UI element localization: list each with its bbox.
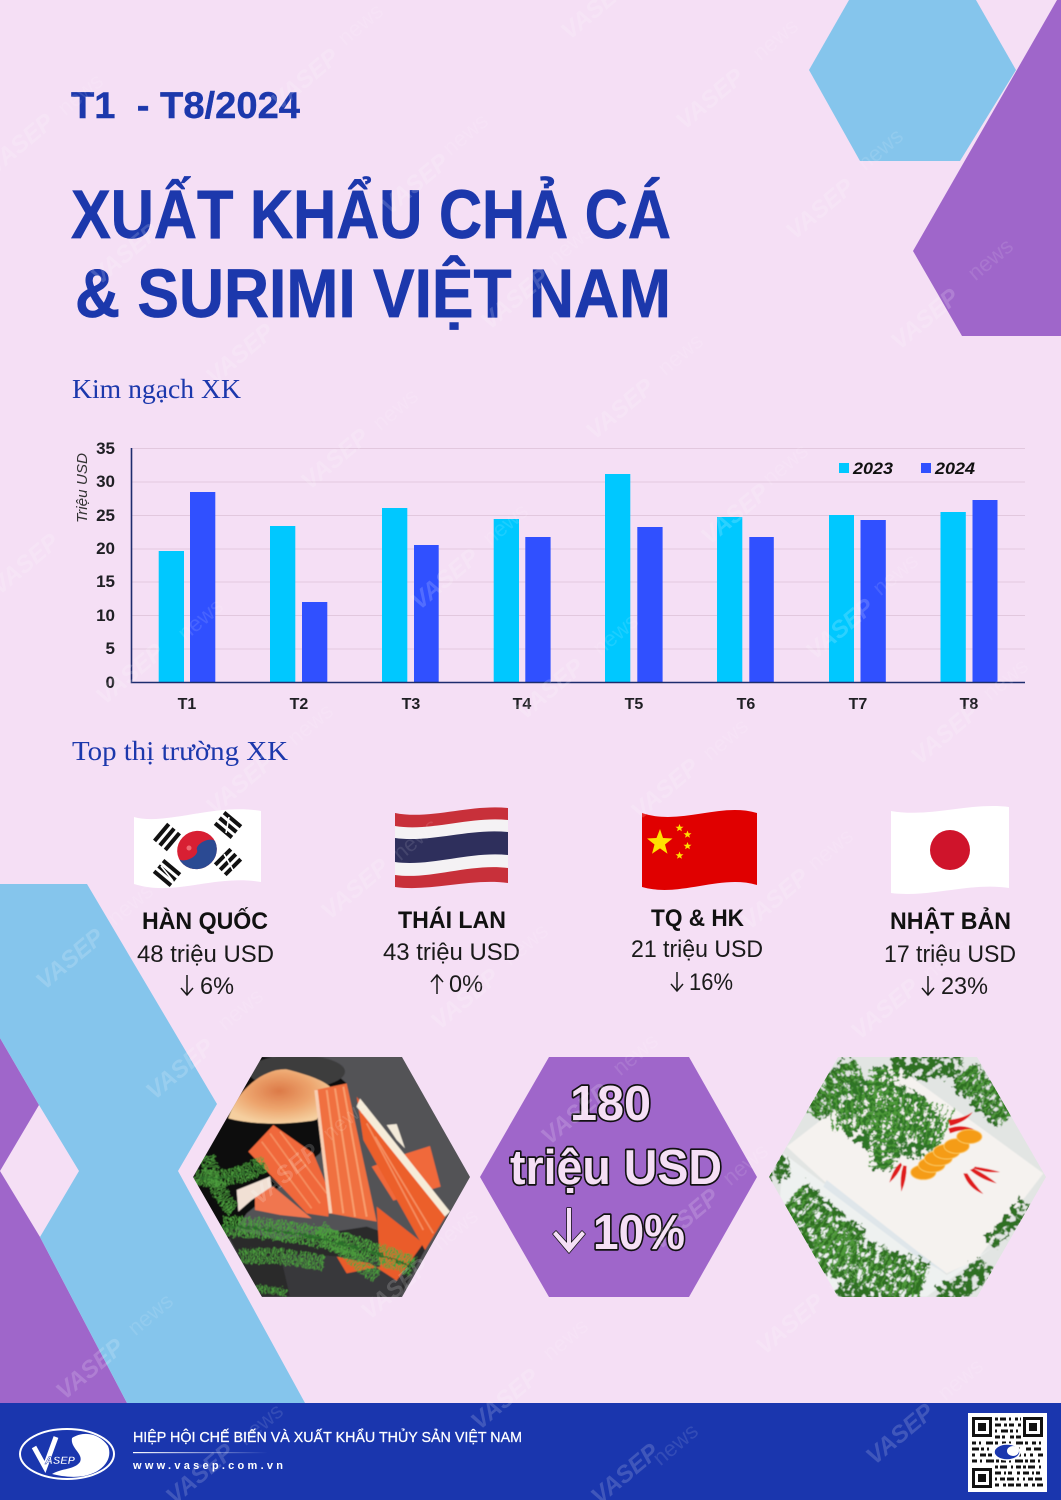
y axis labels — [96, 439, 115, 692]
label: Thailand: THÁI LAN — [398, 906, 506, 934]
footer band — [0, 1403, 1061, 1500]
watermark pattern: VASEP — [646, 1183, 725, 1255]
watermark pattern: news — [367, 383, 423, 435]
total value: triệu USD — [510, 1141, 722, 1195]
value: Japan: 17 triệu USD — [884, 941, 1016, 968]
watermark pattern: VASEP — [846, 973, 925, 1045]
watermark pattern: news — [212, 983, 268, 1035]
icon: South Korea flag — [134, 809, 261, 888]
watermark pattern: VASEP — [316, 853, 395, 925]
website: www.vasep.com.vn — [132, 1460, 283, 1472]
legend — [839, 459, 976, 478]
change: South Korea: 6% — [200, 973, 234, 1000]
photo: surimi block in hexagon — [769, 1057, 1046, 1297]
watermark pattern: news — [427, 1203, 483, 1255]
legend: 2023 — [852, 459, 894, 478]
watermark pattern: news — [647, 1418, 703, 1470]
watermark pattern: VASEP — [886, 283, 965, 355]
x axis labels: T6 — [737, 696, 755, 713]
legend: 2024 — [934, 459, 976, 478]
change: Japan: 23% — [941, 973, 988, 1000]
watermark pattern: VASEP — [141, 1033, 220, 1105]
icon: Thailand flag — [395, 807, 508, 888]
value: China and Hong Kong: 21 triệu USD — [631, 936, 763, 963]
title — [71, 176, 671, 332]
watermark pattern: news — [717, 1138, 773, 1190]
watermark pattern: news — [437, 108, 493, 160]
watermark pattern: VASEP — [536, 1078, 615, 1150]
watermark pattern: VASEP — [376, 148, 455, 220]
market: South Korea — [134, 809, 274, 1000]
watermark pattern: news — [587, 608, 643, 660]
watermark pattern: news — [802, 823, 858, 875]
total value — [510, 1077, 722, 1260]
x axis labels: T8 — [960, 696, 978, 713]
change: Thailand: 0% — [449, 971, 483, 998]
watermark pattern: VASEP — [476, 263, 555, 335]
watermark pattern: VASEP — [246, 1138, 325, 1210]
watermark pattern: news — [962, 233, 1018, 285]
watermark pattern: VASEP — [406, 543, 485, 615]
watermark pattern: VASEP — [201, 748, 280, 820]
watermark pattern: news — [102, 878, 158, 930]
watermark pattern: news — [497, 918, 553, 970]
change: Thailand — [431, 971, 483, 998]
decorative shapes bottom left — [0, 884, 305, 1403]
watermark pattern: VASEP — [91, 638, 170, 710]
value: Thailand: 43 triệu USD — [383, 939, 520, 966]
logo: VASEP — [20, 1429, 114, 1479]
watermark pattern: VASEP — [751, 1288, 830, 1360]
bars 2023 — [159, 474, 966, 682]
watermark pattern: news — [932, 1353, 988, 1405]
market: Thailand — [383, 807, 520, 998]
watermark pattern: news — [757, 438, 813, 490]
market: China and Hong Kong — [631, 810, 763, 996]
watermark pattern: VASEP — [296, 423, 375, 495]
watermark pattern: VASEP — [781, 173, 860, 245]
summary hexagon: total export — [480, 1057, 757, 1297]
watermark pattern: news — [122, 1288, 178, 1340]
watermark pattern: news — [542, 218, 598, 270]
photo: crab sticks in hexagon — [193, 1057, 470, 1297]
change: China and Hong Kong — [671, 969, 733, 996]
watermark pattern: VASEP — [356, 1253, 435, 1325]
watermark pattern: VASEP — [671, 63, 750, 135]
watermark pattern: VASEP — [906, 698, 985, 770]
axes — [132, 448, 1025, 682]
heading: top markets: Top thị trường XK — [72, 736, 289, 766]
icon: China flag — [642, 810, 757, 890]
x axis labels: T5 — [625, 696, 643, 713]
label: South Korea: HÀN QUỐC — [142, 907, 268, 935]
label: Japan: NHẬT BẢN — [890, 906, 1011, 935]
x axis labels: T2 — [290, 696, 308, 713]
watermark pattern: VASEP — [696, 478, 775, 550]
label: China and Hong Kong: TQ & HK — [651, 905, 744, 932]
watermark pattern: VASEP — [266, 43, 345, 115]
bars 2024 — [190, 492, 998, 682]
organisation name: HIỆP HỘI CHẾ BIẾN VÀ XUẤT KHẨU THỦY SẢN VIỆT NAM — [133, 1428, 522, 1446]
watermark pattern: news — [852, 123, 908, 175]
x axis labels — [178, 696, 978, 713]
watermark pattern: VASEP — [86, 218, 165, 290]
y axis labels: 10 — [96, 606, 115, 625]
x axis labels: T4 — [513, 696, 531, 713]
watermark pattern: news — [917, 933, 973, 985]
watermark pattern: news — [282, 698, 338, 750]
title: & SURIMI VIỆT NAM — [75, 255, 671, 332]
y axis unit: Triệu USD — [75, 453, 91, 523]
watermark pattern: news — [747, 13, 803, 65]
watermark pattern: VASEP — [31, 923, 110, 995]
y axis labels: 35 — [96, 439, 115, 458]
watermark pattern: news — [172, 593, 228, 645]
x axis labels: T7 — [849, 696, 867, 713]
change: South Korea — [181, 973, 234, 1000]
watermark pattern: news — [822, 1248, 878, 1300]
watermark pattern: VASEP — [626, 753, 705, 825]
y axis labels: 15 — [96, 572, 115, 591]
QR code — [968, 1413, 1047, 1492]
watermark pattern: news — [537, 1313, 593, 1365]
watermark pattern: news — [697, 713, 753, 765]
title: XUẤT KHẨU CHẢ CÁ — [71, 176, 671, 253]
y axis labels: 25 — [96, 506, 115, 525]
watermark pattern: news — [607, 1028, 663, 1080]
watermark pattern: VASEP — [511, 653, 590, 725]
heading: export value: Kim ngạch XK — [72, 374, 242, 404]
watermark pattern: VASEP — [426, 963, 505, 1035]
icon: Japan flag — [891, 806, 1009, 894]
total value: 10% — [593, 1206, 685, 1260]
y axis labels: 5 — [106, 639, 115, 658]
watermark pattern: news — [977, 653, 1033, 705]
y axis labels: 0 — [106, 673, 115, 692]
watermark pattern: news — [317, 1093, 373, 1145]
watermark pattern: VASEP — [466, 1363, 545, 1435]
watermark pattern: VASEP — [736, 863, 815, 935]
watermark pattern: news — [867, 548, 923, 600]
watermark pattern: VASEP — [801, 593, 880, 665]
watermark pattern: news — [652, 328, 708, 380]
x axis labels: T3 — [402, 696, 420, 713]
watermark pattern: VASEP — [581, 373, 660, 445]
change: China and Hong Kong: 16% — [689, 969, 733, 996]
period label: T1 - T8/2024 — [71, 85, 300, 126]
value: South Korea: 48 triệu USD — [137, 941, 274, 968]
watermark pattern: news — [477, 498, 533, 550]
y axis labels: 30 — [96, 472, 115, 491]
market: Japan — [884, 806, 1016, 1000]
watermark pattern: news — [52, 68, 108, 120]
total value: 180 — [570, 1077, 651, 1131]
watermark pattern: VASEP — [51, 1333, 130, 1405]
watermark pattern: VASEP — [201, 318, 280, 390]
watermark pattern: VASEP — [861, 1398, 940, 1470]
logo: VASEP: ASEP — [44, 1455, 76, 1467]
bar chart: monthly export value — [75, 439, 1025, 713]
decorative hexagons top right — [809, 0, 1061, 336]
y axis labels: 20 — [96, 539, 115, 558]
watermark pattern: news — [387, 813, 443, 865]
x axis labels: T1 — [178, 696, 196, 713]
watermark pattern: news — [232, 1398, 288, 1450]
